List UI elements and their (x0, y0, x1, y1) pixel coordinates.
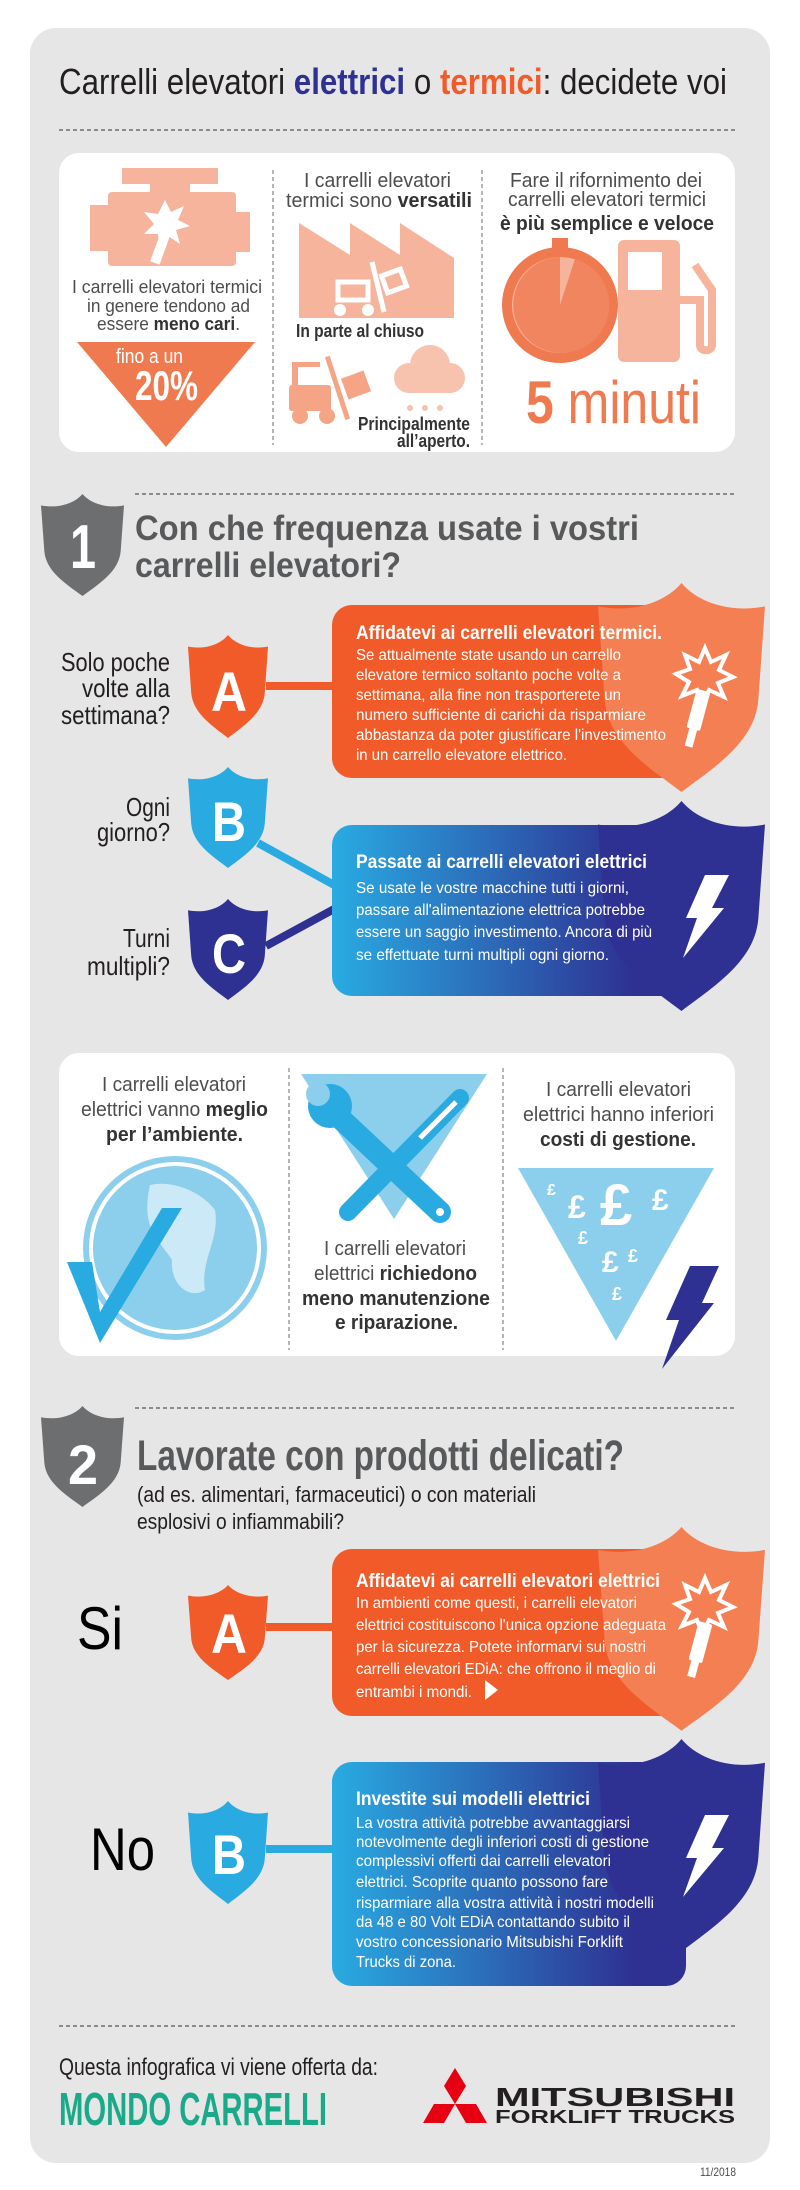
option: No: No (90, 1816, 155, 1883)
text: cheaper: I carrelli elevatori termici (72, 277, 262, 297)
heading 2: Lavorate con prodotti delicati? (137, 1432, 624, 1480)
icon: engine (90, 168, 250, 266)
option B: every day: B (212, 790, 246, 853)
logo: Mitsubishi Forklift Trucks (423, 2068, 735, 2127)
icon: pounds triangle: £ (568, 1189, 586, 1225)
option C: multiple shifts: multipli? (87, 951, 170, 981)
callout: thermal recommendation: settimana, alla fine non trasporterete un (356, 687, 621, 704)
option C: multiple shifts (87, 899, 268, 1000)
callout: thermal recommendation: abbastanza da poter giustificare l'investimento (356, 727, 666, 744)
heading 2: esplosivi o infiammabili? (137, 1509, 344, 1534)
text: refuelling: Fare il rifornimento dei (510, 170, 702, 192)
option: No (90, 1801, 336, 1904)
label: outdoors: all’aperto. (397, 431, 470, 451)
icon: pounds triangle: £ (612, 1284, 622, 1304)
text: environment (81, 1074, 268, 1146)
option A: few times a week: settimana? (61, 700, 170, 730)
callout: electric for delicate products: Affidatevi ai carrelli elevatori elettrici (356, 1571, 660, 1592)
heading 2: 2 (68, 1433, 98, 1496)
icon: pounds triangle (518, 1168, 714, 1341)
triangle: 20% (77, 342, 255, 447)
icon: pounds triangle: £ (602, 1246, 619, 1279)
text: less maintenance: e riparazione. (335, 1312, 458, 1334)
heading 1: Con che frequenza usate i vostri (135, 509, 639, 548)
option: Si: A (211, 1602, 247, 1665)
icon: pounds triangle: £ (600, 1173, 632, 1238)
callout: electric recommendation: Passate ai carrelli elevatori elettrici (356, 852, 647, 873)
callout: invest in electric models: vostro concessionario Mitsubishi Forklift (356, 1934, 624, 1951)
heading 1 (41, 494, 639, 596)
callout: invest in electric models: Trucks di zona. (356, 1954, 456, 1971)
callout: invest in electric models: risparmiare alla vostra attività i nostri modelli (356, 1895, 654, 1912)
callout: electric for delicate products: elettrici costituiscono l'unica opzione adeguata (356, 1617, 666, 1634)
icon: dark bolt (662, 1266, 719, 1369)
text: cheaper: essere meno cari. (97, 314, 240, 334)
triangle: 20%: 20% (135, 362, 198, 409)
option B: every day: Ogni (126, 792, 170, 822)
label: outdoors: Principalmente (358, 414, 470, 434)
callout: electric recommendation: se effettuate turni multipli ogni giorno. (356, 947, 609, 964)
heading 2 (41, 1406, 624, 1534)
icon: stopwatch and fuel pump (502, 238, 712, 363)
text: refuelling: carrelli elevatori termici (508, 189, 706, 211)
callout: invest in electric models: complessivi offerti dai carrelli elevatori (356, 1853, 611, 1870)
text: less maintenance: elettrici richiedono (314, 1263, 477, 1285)
option A: few times a week: volte alla (82, 673, 170, 703)
icon: pounds triangle: £ (578, 1228, 588, 1248)
option B: every day: giorno? (97, 817, 170, 847)
callout: electric for delicate products: In ambienti come questi, i carrelli elevatori (356, 1595, 637, 1612)
icon: wrench and screwdriver (301, 1074, 487, 1219)
callout: invest in electric models: elettrici. Scoprite quanto possono fare (356, 1874, 608, 1891)
panel: electric advantages (59, 1053, 735, 1369)
callout: thermal recommendation: Affidatevi ai carrelli elevatori termici. (356, 623, 662, 644)
callout: invest in electric models: Investite sui modelli elettrici (356, 1789, 590, 1810)
option A: few times a week: A (211, 660, 247, 723)
callout: thermal recommendation: elevatore termico soltanto poche volte a (356, 667, 621, 684)
text: environment: per l’ambiente. (106, 1124, 243, 1146)
option: No: B (212, 1823, 246, 1886)
callout: electric recommendation: essere un saggio investimento. Ancora di più (356, 924, 652, 941)
callout: electric recommendation: Se usate le vostre macchine tutti i giorni, (356, 880, 629, 897)
text: versatile (286, 170, 472, 212)
option: Si (77, 1585, 336, 1680)
icon: forklift outdoors and rain (289, 345, 465, 424)
callout: thermal recommendation: numero sufficiente di carichi da risparmiare (356, 707, 646, 724)
callout: electric recommendation: passare all'alimentazione elettrica potrebbe (356, 902, 645, 919)
icon: pounds triangle: £ (547, 1182, 556, 1199)
callout: thermal recommendation: Se attualmente state usando un carrello (356, 647, 621, 664)
icon: globe with check (67, 1156, 267, 1343)
label: outdoors (358, 414, 470, 451)
label: indoors: In parte al chiuso (296, 321, 424, 341)
text: 5 minuti: 5 minuti (526, 369, 701, 436)
option C: multiple shifts: C (212, 922, 246, 985)
text: environment: I carrelli elevatori (102, 1074, 246, 1096)
date: 11/2018 (700, 2165, 736, 2179)
callout: invest in electric models (332, 1739, 765, 1986)
text: versatile: I carrelli elevatori (304, 170, 451, 192)
footer: sponsor (59, 2054, 378, 2135)
text: lower costs (523, 1079, 714, 1151)
logo: Mitsubishi Forklift Trucks: MITSUBISHI (495, 2082, 735, 2112)
callout: electric for delicate products: carrelli elevatori EDiA: che offrono il meglio di (356, 1661, 656, 1678)
callout: thermal recommendation (332, 583, 765, 792)
icon: pounds triangle: £ (652, 1184, 669, 1217)
option A: few times a week: Solo poche (61, 647, 170, 677)
text: refuelling: è più semplice e veloce (500, 213, 714, 235)
callout: electric recommendation (332, 801, 765, 1011)
heading 1: 1 (70, 513, 96, 582)
callout: invest in electric models: notevolmente degli inferiori costi di gestione (356, 1834, 649, 1851)
triangle: 20%: fino a un (116, 346, 183, 368)
heading 1: carrelli elevatori? (135, 546, 401, 585)
text: lower costs: costi di gestione. (540, 1129, 696, 1151)
text: less maintenance: I carrelli elevatori (324, 1238, 466, 1260)
text: environment: elettrici vanno meglio (81, 1099, 268, 1121)
icon: pounds triangle: £ (628, 1246, 638, 1266)
text: refuelling (500, 170, 714, 235)
panel: thermal advantages (59, 153, 735, 452)
footer: sponsor: Questa infografica vi viene offerta da: (59, 2054, 378, 2081)
icon: factory with forklift (299, 223, 454, 318)
text: less maintenance: meno manutenzione (302, 1288, 490, 1310)
option C: multiple shifts: Turni (123, 923, 170, 953)
text: less maintenance (302, 1238, 490, 1334)
callout: thermal recommendation: in un carrello elevatore elettrico. (356, 747, 567, 764)
option: Si: Si (77, 1595, 123, 1662)
logo: Mitsubishi Forklift Trucks: FORKLIFT TRUCKS (495, 2107, 735, 2127)
callout: electric for delicate products: per la sicurezza. Potete informarvi sui nostri (356, 1639, 646, 1656)
callout: electric for delicate products: entrambi i mondi. (356, 1684, 472, 1701)
text: versatile: termici sono versatili (286, 190, 472, 212)
footer: sponsor: MONDO CARRELLI (59, 2083, 327, 2135)
heading 2: (ad es. alimentari, farmaceutici) o con materiali (137, 1482, 536, 1507)
callout: invest in electric models: da 48 e 80 Volt EDiA contattando subito il (356, 1914, 630, 1931)
text: cheaper: in genere tendono ad (87, 296, 250, 316)
connector lines B and C (258, 843, 336, 946)
text: cheaper (72, 277, 262, 334)
text: lower costs: I carrelli elevatori (546, 1079, 691, 1101)
title: Carrelli elevatori elettrici o termici: decidete voi (59, 61, 727, 102)
option A: few times a week (61, 635, 336, 738)
text: lower costs: elettrici hanno inferiori (523, 1104, 714, 1126)
option B: every day (97, 767, 268, 868)
callout: electric for delicate products (332, 1527, 765, 1731)
callout: invest in electric models: La vostra attività potrebbe avvantaggiarsi (356, 1815, 630, 1832)
